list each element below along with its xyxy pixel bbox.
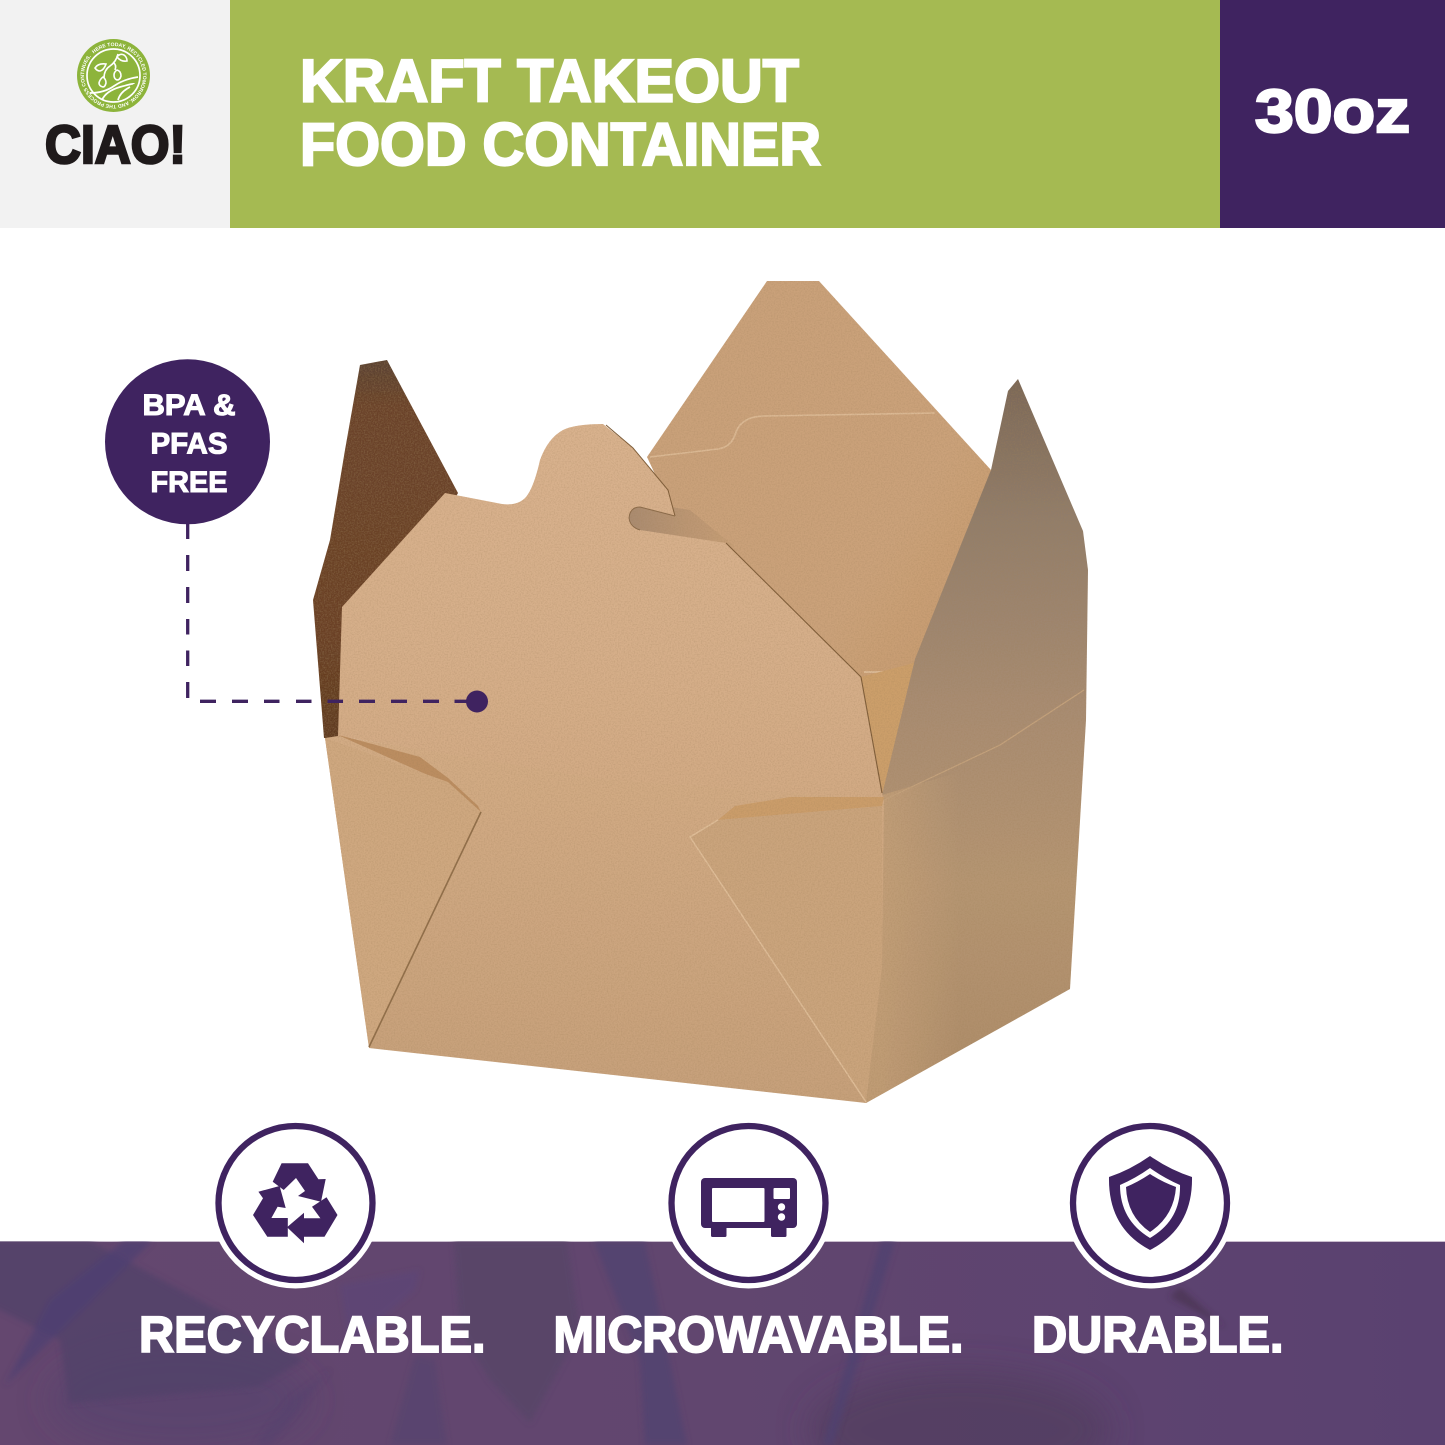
right tuck flap — [690, 806, 882, 1102]
title: KRAFT TAKEOUT — [300, 48, 799, 114]
right side panel — [866, 379, 1088, 1103]
panel: bottom band — [0, 1241, 1445, 1445]
front lid — [338, 424, 884, 802]
logo panel — [0, 0, 230, 228]
callout dot — [466, 690, 488, 712]
label: microwavable: MICROWAVABLE. — [554, 1306, 964, 1363]
label: recyclable: RECYCLABLE. — [139, 1306, 486, 1363]
fold shadow left — [338, 735, 481, 812]
callout text: BPA & — [142, 389, 236, 422]
callout text: FREE — [150, 466, 228, 499]
callout text — [142, 389, 236, 499]
title: FOOD CONTAINER — [300, 111, 821, 178]
title panel — [230, 0, 1220, 228]
product: kraft takeout box — [313, 281, 1088, 1103]
callout: BPA and PFAS free — [105, 359, 488, 712]
box front face — [325, 735, 884, 1103]
callout text: PFAS — [150, 428, 228, 460]
callout badge — [105, 359, 270, 524]
icon: recycle — [210, 1118, 381, 1288]
size label: 30oz — [1255, 78, 1410, 145]
size panel — [1220, 0, 1445, 228]
band leaf background — [0, 1241, 1225, 1445]
label: durable: DURABLE. — [1032, 1306, 1284, 1363]
fold shadow right — [718, 797, 884, 820]
icon: microwave — [663, 1118, 834, 1288]
icon: shield — [1064, 1118, 1236, 1288]
left tuck flap — [325, 738, 481, 1047]
title — [300, 48, 821, 178]
left inner flap — [313, 360, 458, 740]
callout dashed leader — [188, 524, 477, 701]
panel: header — [0, 0, 1445, 228]
tab slot — [625, 500, 735, 547]
logo badge: HERE TODAY, RECYCLED TOMORROW. AND THE PROCESS CONTINUES. — [80, 42, 146, 108]
back flap — [625, 281, 991, 800]
logo wordmark: CIAO! — [45, 115, 186, 175]
